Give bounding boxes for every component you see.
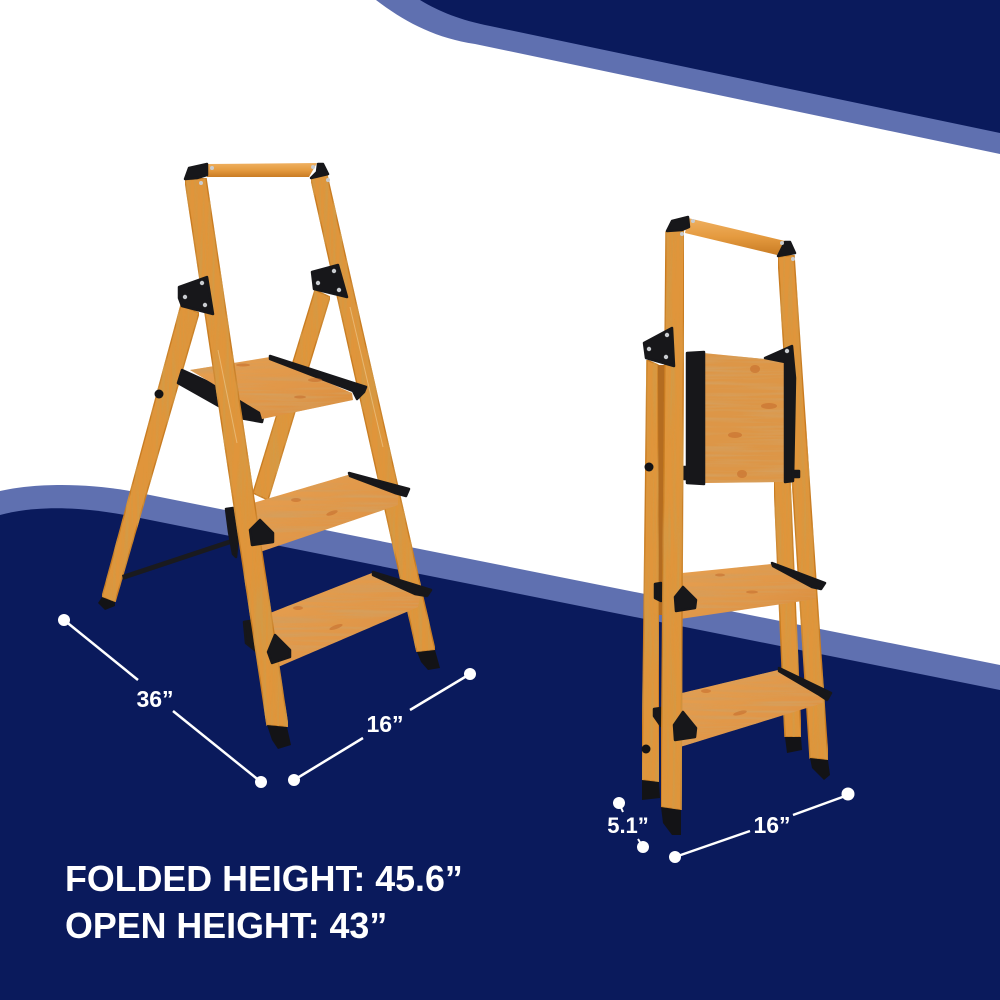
leg highlights <box>218 307 383 447</box>
bottom navy floor <box>0 485 1000 1000</box>
dimension: 16 inch open: 16” <box>366 711 404 737</box>
step end blocks <box>674 587 696 740</box>
top right banner <box>376 0 1000 154</box>
rear left leg <box>642 360 659 782</box>
folded ladder <box>642 217 831 835</box>
feet <box>642 737 830 835</box>
top rail <box>207 163 317 177</box>
gap strip <box>658 365 666 615</box>
hinge <box>644 328 674 366</box>
dimension: 5.1 inch <box>607 797 649 853</box>
back left leg <box>102 305 199 602</box>
top corner caps <box>185 164 328 179</box>
open ladder <box>98 163 440 749</box>
bottom step <box>270 572 431 667</box>
hinges <box>179 265 347 314</box>
bottom step <box>680 668 831 747</box>
dimension: 36 inch: 36” <box>136 686 174 712</box>
folded top step <box>684 346 799 484</box>
front left leg <box>661 228 684 810</box>
dimension: 36 inch <box>58 614 267 788</box>
top corner caps <box>667 217 795 256</box>
dimension: 5.1 inch: 5.1” <box>607 813 649 838</box>
height text <box>65 859 463 946</box>
step end blocks <box>250 520 290 663</box>
rear right leg <box>774 480 801 737</box>
height text: FOLDED HEIGHT: 45.6” <box>65 859 463 899</box>
dimension: 16 inch folded <box>669 788 854 863</box>
dimension: 16 inch open <box>288 668 476 786</box>
front right leg <box>311 175 435 652</box>
middle step <box>253 473 409 552</box>
dimension: 16 inch folded: 16” <box>753 812 791 838</box>
pivots and screws <box>642 219 795 754</box>
front right leg <box>778 255 828 760</box>
top rail <box>685 218 785 255</box>
back right leg <box>253 290 330 500</box>
middle step <box>680 563 825 619</box>
front left leg <box>185 178 288 727</box>
pivot and screws <box>154 165 341 398</box>
top step <box>178 356 366 422</box>
height text: OPEN HEIGHT: 43” <box>65 906 387 946</box>
spreader bar <box>122 537 237 580</box>
feet <box>98 597 440 749</box>
rear step brackets <box>654 583 661 726</box>
rear step brackets <box>226 508 256 651</box>
